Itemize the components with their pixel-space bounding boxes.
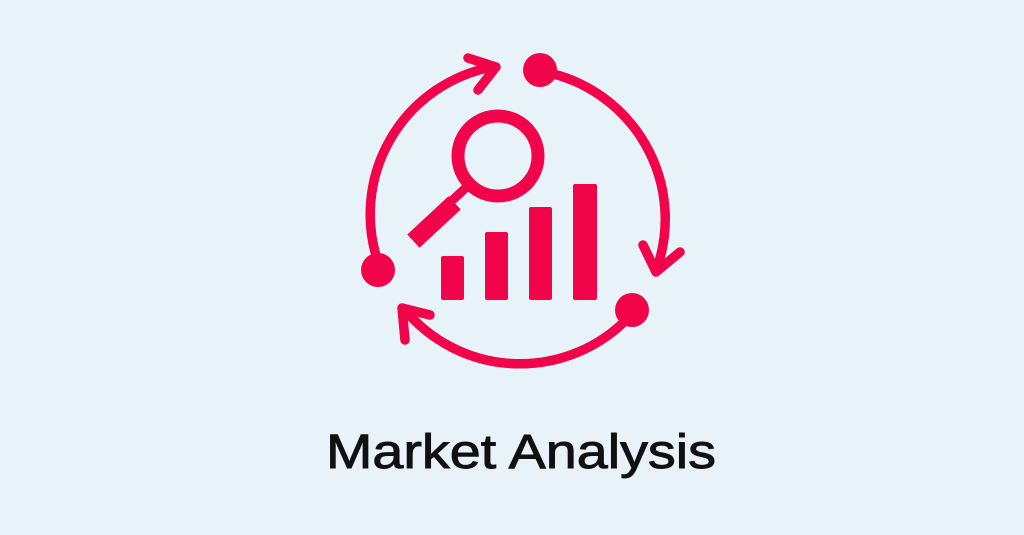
arrow arc: top to right (545, 72, 680, 272)
title: Market Analysis (326, 426, 716, 479)
arrow arc: bottom (402, 308, 628, 364)
dots (361, 53, 649, 327)
bar chart (441, 184, 597, 300)
magnifier (420, 116, 538, 235)
arrow arc: left to top (370, 58, 496, 262)
icon: market analysis (361, 53, 680, 364)
